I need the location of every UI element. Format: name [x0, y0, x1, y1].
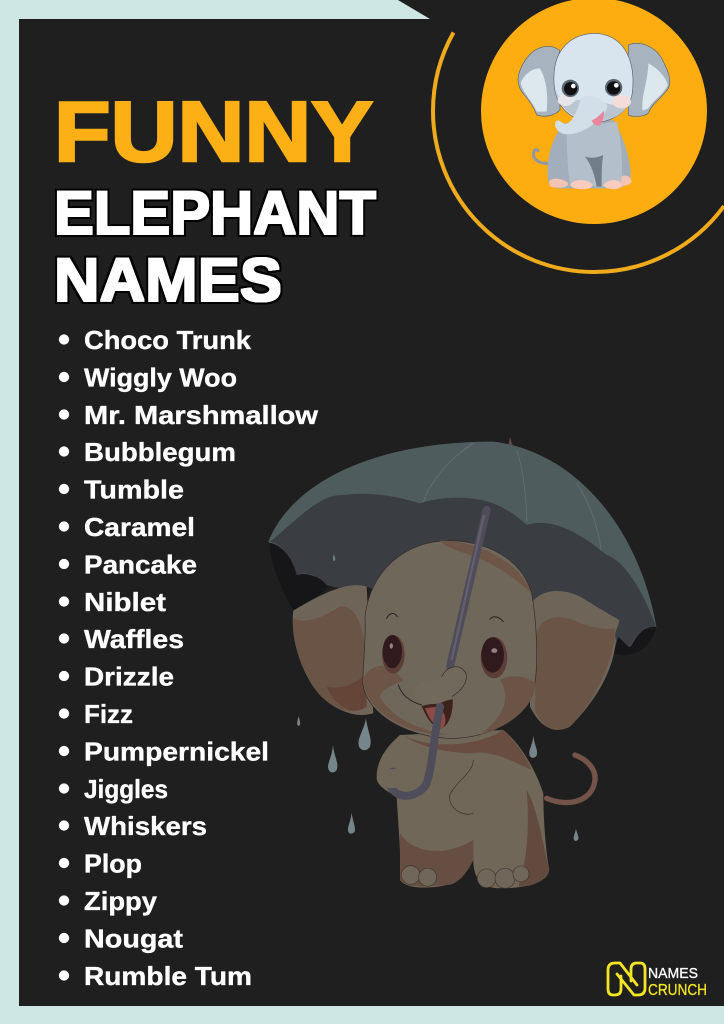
left hand over handle: [377, 769, 406, 788]
umbrella ribs: [423, 443, 602, 553]
name: Drizzle: Drizzle: [84, 662, 174, 692]
left ear: [518, 46, 560, 116]
smile: [398, 685, 422, 705]
name: Jiggles: Jiggles: [84, 774, 168, 804]
cheeks: [612, 95, 631, 108]
name: Nougat: Nougat: [84, 923, 183, 953]
toes: [401, 866, 529, 888]
name: Fizz: Fizz: [84, 699, 133, 729]
head: [363, 541, 537, 738]
name: Caramel: Caramel: [84, 512, 195, 542]
name: Niblet: Niblet: [84, 587, 166, 617]
logo word NAMES: NAMES: [648, 965, 698, 982]
title: FUNNY: FUNNY: [54, 85, 373, 180]
name: Rumble Tum: Rumble Tum: [84, 961, 252, 991]
name: Choco Trunk: Choco Trunk: [84, 325, 252, 355]
logo mark: [608, 963, 645, 995]
illustration: elephant with umbrella: [268, 437, 657, 888]
logo: Names Crunch: [608, 963, 707, 999]
tail: [534, 150, 548, 163]
right arm: [449, 757, 503, 814]
name: Tumble: Tumble: [84, 475, 184, 505]
name: Pancake: Pancake: [84, 549, 197, 579]
orange circle badge: [481, 0, 707, 224]
umbrella shadow left: [269, 543, 328, 610]
left ear: [293, 585, 373, 715]
decorative ring arc: [433, 32, 724, 272]
head: [554, 33, 633, 122]
bullet dots: [59, 334, 69, 980]
trunk: [555, 96, 607, 134]
tongue: [592, 111, 604, 126]
raindrops: [297, 554, 579, 841]
mouth and tongue: [422, 699, 453, 728]
tail: [547, 755, 595, 803]
umbrella shadow right: [613, 627, 657, 655]
name: Whiskers: Whiskers: [84, 811, 207, 841]
umbrella canopy top: [268, 442, 657, 647]
feet: [549, 179, 568, 188]
umbrella tip: [508, 437, 513, 445]
body: [377, 730, 549, 888]
name: Wiggly Woo: Wiggly Woo: [84, 362, 237, 392]
eyebrows: [387, 613, 503, 622]
name: Zippy: Zippy: [84, 886, 158, 916]
body: [547, 120, 631, 188]
eyes: [382, 635, 405, 674]
umbrella underside: [270, 494, 657, 653]
title: NAMES: NAMES: [54, 246, 282, 314]
name: Bubblegum: Bubblegum: [84, 437, 236, 467]
right ear: [628, 43, 670, 117]
eyes: [562, 80, 579, 97]
chest and front legs: [567, 122, 622, 187]
name: Plop: Plop: [84, 849, 142, 879]
name: Mr. Marshmallow: Mr. Marshmallow: [84, 400, 319, 430]
name: Waffles: Waffles: [84, 624, 184, 654]
title: ELEPHANT: ELEPHANT: [54, 179, 376, 247]
name: Pumpernickel: Pumpernickel: [84, 736, 269, 766]
trunk: [414, 667, 466, 704]
umbrella shaft: [389, 510, 487, 796]
list of funny elephant names: [59, 325, 319, 991]
icon: small sitting elephant: [518, 33, 670, 189]
logo word CRUNCH: CRUNCH: [648, 982, 707, 999]
right ear: [530, 591, 619, 730]
